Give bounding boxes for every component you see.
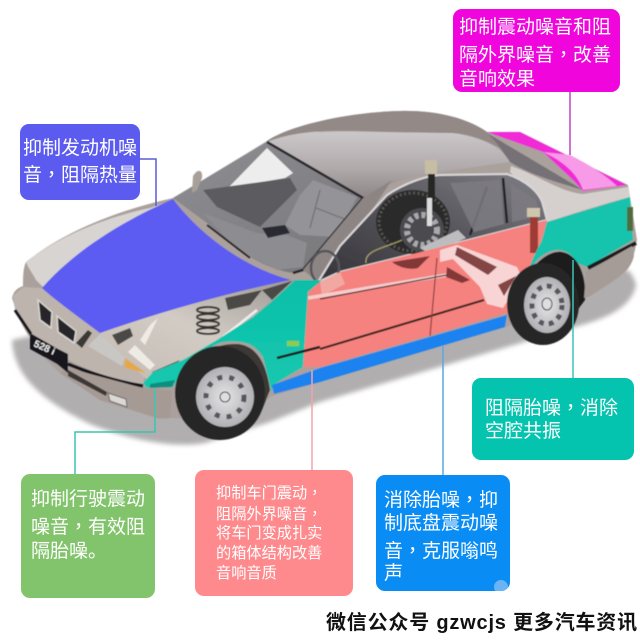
- callout: trunk noise: 音响效果: [459, 69, 535, 90]
- engine parts: [112, 281, 292, 376]
- callout: door vibration: 的箱体结构改善: [216, 545, 322, 562]
- wiper: [207, 225, 250, 258]
- rear quarter teal: [527, 197, 633, 277]
- bumper black strip left: [15, 310, 31, 334]
- suspension hatch: [180, 352, 228, 405]
- rear shock absorber: [425, 160, 437, 226]
- spare tyre: [376, 190, 450, 254]
- nose panel light: [13, 287, 145, 385]
- callout: door vibration: 阻隔外界噪音，: [216, 502, 322, 524]
- car body: [12, 111, 637, 440]
- callout: trunk noise: 隔外界噪音，改善: [459, 40, 611, 67]
- front spring: [197, 307, 219, 334]
- callout: chassis vibration: [376, 475, 510, 591]
- rear suspension arm: [420, 230, 466, 254]
- hood side highlight: [26, 200, 173, 288]
- seat back: [285, 180, 357, 237]
- callout: tyre cavity noise: 阻隔胎噪，消除: [485, 393, 618, 420]
- headlight silver: [88, 334, 125, 366]
- callout: driving vibration: 噪音，有效阻: [31, 512, 145, 539]
- windshield glare: [228, 148, 293, 188]
- front arch interior: [178, 344, 270, 420]
- callout: driving vibration: 抑制行驶震动: [31, 489, 145, 510]
- rear wheel: [507, 263, 579, 345]
- engine highlights: [128, 318, 158, 370]
- front fender teal: [143, 280, 322, 393]
- shoulder highlight: [510, 166, 630, 222]
- chassis bar: [308, 275, 447, 298]
- seat panel lines: [310, 190, 347, 228]
- door seam: [430, 258, 437, 336]
- steering wheel: [311, 251, 339, 285]
- mirror: [192, 171, 202, 193]
- body silhouette: [12, 111, 637, 420]
- callout: tyre cavity noise: [472, 378, 634, 460]
- callout: trunk noise: [453, 9, 620, 92]
- callout: door vibration: 抑制车门震动，: [216, 481, 322, 503]
- callout: door vibration: [195, 470, 353, 596]
- number plate: 528 i: [32, 339, 57, 358]
- callout: chassis vibration: 消除胎噪，抑: [384, 485, 498, 512]
- front wheel: [175, 346, 265, 440]
- trunk highlight: [543, 152, 617, 190]
- turn signal: [125, 358, 146, 373]
- bumper black strip right: [68, 364, 143, 386]
- ground shadow: [12, 268, 636, 445]
- window pillars: [470, 178, 507, 235]
- windshield: [173, 142, 363, 273]
- fender dark detail: [150, 380, 175, 388]
- door card: [203, 178, 297, 227]
- fog light: [108, 393, 127, 407]
- chassis subframe: [440, 245, 522, 308]
- callout: engine noise: 抑制发动机噪: [23, 138, 137, 159]
- rear arch: [510, 252, 585, 320]
- callout: chassis vibration: 声: [384, 563, 403, 584]
- rear light: [627, 207, 633, 231]
- A pillar area: [303, 180, 392, 282]
- dashboard: [203, 213, 307, 270]
- callout: engine noise: [20, 124, 140, 200]
- callout: driving vibration: [21, 474, 155, 598]
- callout: engine noise: 音，阻隔热量: [23, 160, 137, 187]
- sill blue: [272, 315, 507, 394]
- door waist strip: [320, 300, 484, 349]
- grille corner dark: [76, 330, 92, 348]
- number plate: [30, 333, 68, 373]
- callout: tyre cavity noise: 空腔共振: [485, 421, 561, 442]
- callout: door vibration: 音响音质: [216, 565, 277, 582]
- grille: [38, 300, 76, 343]
- chassis shadows: [392, 247, 516, 296]
- front door window: [318, 174, 547, 282]
- callout: driving vibration: 隔胎噪。: [31, 541, 107, 562]
- callout: trunk noise: 抑制震动噪音和阻: [459, 17, 611, 38]
- rear glass panes: [450, 180, 540, 232]
- footwell dark: [262, 225, 290, 238]
- door salmon panel: [303, 220, 547, 367]
- fender side marker: [287, 341, 299, 346]
- rear bumper: [584, 246, 634, 298]
- rear shock: [527, 208, 540, 253]
- roof panel: [267, 131, 510, 198]
- brake pipe: [366, 240, 402, 263]
- fender strip: [277, 347, 320, 358]
- callout: chassis vibration: 音，克服嗡鸣: [384, 536, 498, 563]
- callout: door vibration: 将车门变成扎实: [216, 525, 322, 542]
- silver strut bar: [223, 310, 257, 337]
- panel highlight: [320, 272, 345, 296]
- roof edge strip: [267, 111, 500, 148]
- lower bumper: [60, 368, 172, 418]
- hood blue: [42, 199, 291, 333]
- callout: chassis vibration: 制底盘震动噪: [384, 513, 498, 534]
- footer credit: 微信公众号 gzwcjs 更多汽车资讯: [326, 612, 638, 634]
- chassis bar line: [320, 275, 447, 299]
- lower grille strip: [68, 370, 107, 396]
- rear black strip: [588, 243, 636, 268]
- trunk pink: [487, 132, 627, 191]
- rear window: [487, 133, 583, 190]
- engine bay: [100, 280, 295, 380]
- windshield frame: [267, 142, 363, 273]
